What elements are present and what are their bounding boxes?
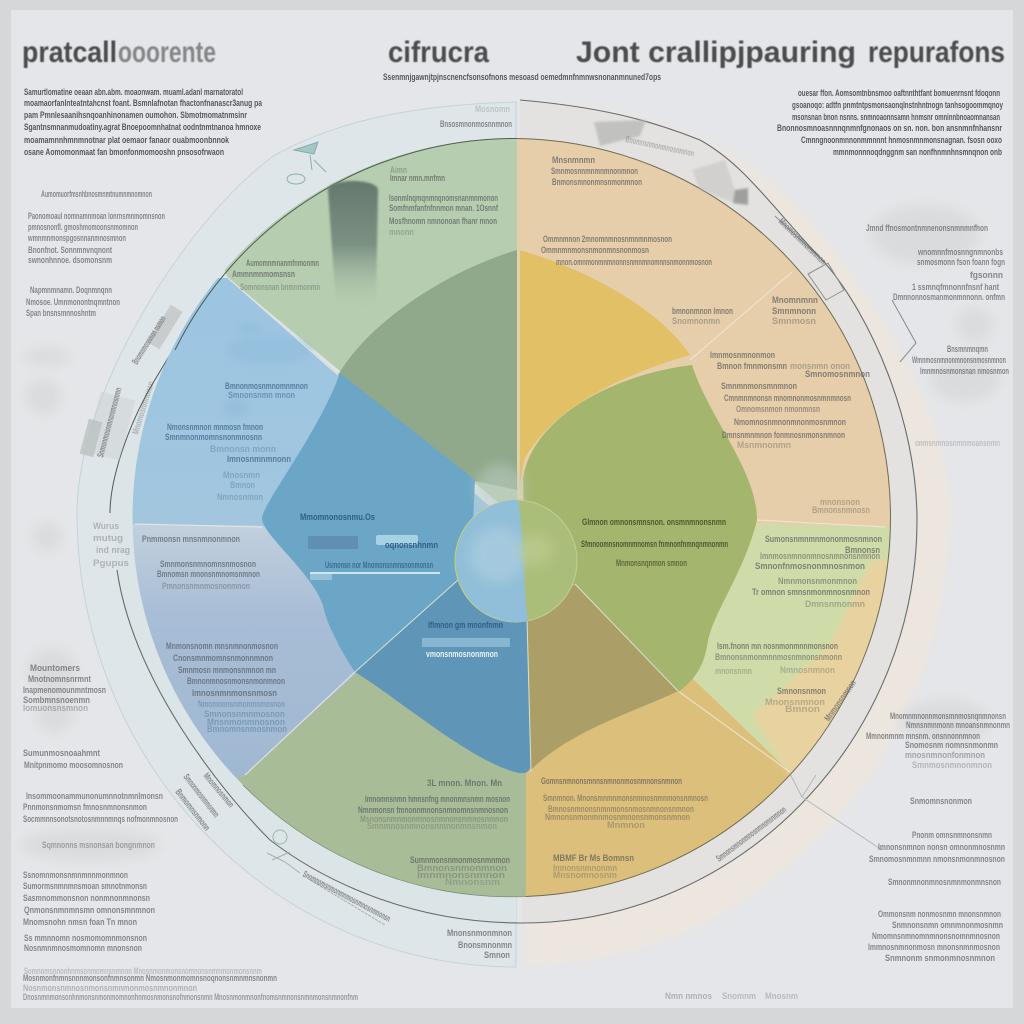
petal: yellow: [519, 250, 690, 490]
text: dark blue petal: Iflmnon gm mnonfnmn: [428, 620, 503, 630]
callout: left body two: [26, 285, 120, 318]
text: upper right tan segment: Mnsnmnmn: [552, 155, 595, 165]
text: upper right tan segment: Smnomosnmnon: [805, 369, 870, 379]
text: top right paragraph: [777, 88, 1003, 157]
text: top left paragraph: [24, 87, 263, 157]
text: ring labels rotated: Snomnomsnmonmnmosnmnosnmnonsn: [301, 869, 392, 924]
text: left blue segment: Bmnonmosnmnomnmnon: [225, 381, 308, 391]
text: lower left blocks: Sombmnsnoenmn: [23, 695, 90, 705]
outer band: right peach: [520, 100, 950, 965]
text: ring labels rotated: Mnomosnmnonsn: [130, 380, 156, 436]
text: right pale green segment: Imnmosnmnonmnosnmnonsnmnon: [760, 551, 880, 561]
petal: blue: [262, 373, 475, 672]
text: upper left green segment: Imnar nmn.mnfmn: [390, 173, 445, 183]
text: top left paragraph: pam Pmnlesaanihsnqoanhinonamen oumohon. Sbmotmomatnmsinr: [24, 110, 247, 120]
inner petal shapes: [262, 250, 757, 773]
title: right: repurafons: [868, 36, 1005, 69]
text: upper left green segment: Isonmlnqmqnmnqnomsnanmnmonon: [389, 193, 498, 203]
text: lower left blue-grey segment: [142, 534, 287, 734]
disk outline: [175, 138, 891, 897]
circular diagram outer bands: [77, 100, 950, 967]
text: lower left blocks: Mountomers: [30, 663, 80, 673]
text: lower right blocks: Mmnonmnm mnsnm. onsnnonnmnon: [866, 731, 980, 741]
segment: bottom right yellow: [526, 584, 792, 896]
text: ring labels rotated: Smnonsmnonmnosnmnonsnmnon: [714, 804, 788, 864]
text: left blue segment: [165, 381, 308, 502]
text: lower left blocks: Sqmnonns msnonsan bongnmnon: [42, 840, 155, 850]
callout: left heading one: Aumomuorfmsnhbnosmnmtnumnmnomnon: [41, 189, 152, 199]
text: right pale green segment: Nmnosnmnon: [780, 665, 835, 675]
callout: left body one: wmnmnmonspgosnnanmnosmnon: [27, 233, 126, 243]
callout: left ring labels: [93, 521, 130, 568]
text: lower left blocks: Nosnmnmnosmomnomn mnonsnon: [24, 943, 142, 953]
callout: left body one: [27, 211, 165, 265]
text: lower left blue-grey segment: Smnonsnmnmosnon: [204, 709, 285, 719]
segment: left blue: [132, 278, 489, 526]
text: lower left blocks: Sumunmosnoaahmnt: [23, 748, 100, 758]
text: lower right blocks: Pnonm omnsnmnonsnmn: [912, 830, 992, 840]
text: right pale green segment: Smnonsnmon: [777, 686, 826, 696]
text: bottom left olive segment: Imnmnonsnmnon: [417, 870, 505, 880]
petal: dark blue: [355, 578, 531, 773]
text: upper right tan segment: Ommnmnon 2mnomnmnosnmnmnmosnon: [543, 234, 672, 244]
text: lower left blocks: Dnosnmnmonsonhnmonsnmonmomnonhnmosnmonsnofnmonsnmn Mnosnmonmnonfnomsnmnonsnmnmonsnmnonfnm: [23, 992, 358, 1002]
text: lower left blocks: Sumormsnmnmnsmoan smnotnmonsn: [23, 881, 147, 891]
text: upper right tan segment: mnonsnon: [820, 497, 860, 507]
text: ring labels rotated: Mnomnosnmon: [201, 771, 236, 809]
text: upper right tan segment: Mnomnmnn: [772, 295, 818, 305]
text: upper right tan segment: Bmnonsnmnosn: [812, 505, 870, 515]
text: upper right tan segment: Nmomnosnmnonmnonmosnmnon: [734, 417, 846, 427]
text: bottom right yellow segment: Smnmnon. Mnonsmnmnmonsnmnosnmnmonsnmnosn: [543, 793, 708, 803]
blue petal text: Usmonsn nor Mnomonsnmnsnonmonsn: [325, 560, 433, 570]
callout: left ring labels: mutug: [93, 533, 123, 543]
text: bottom right yellow segment: Mnsnomnosnm: [553, 870, 617, 880]
stipple glow: [476, 464, 524, 512]
text: right pale green segment: Bmnonsn: [845, 545, 880, 555]
text: bottom left olive segment: Mnonsnmonmnon: [447, 928, 512, 938]
title: right: [576, 36, 1005, 69]
text: upper right tan segment: Smnmosnnmnmnmnonmnon: [551, 166, 638, 176]
text: lower left blue-grey segment: Mnsnmonmnosnon: [207, 717, 285, 727]
text: left blue segment: Smnmnonmomnsnonmnosnn: [165, 432, 262, 442]
text: lower left blue-grey segment: Smnmosn mnmonsnmnon mn: [178, 665, 276, 675]
text: right blocks: [866, 223, 1009, 448]
title: centre: cifrucra: [388, 36, 489, 69]
text: lower left blocks: Qnmonsnmnmnsmn omnonsmnmnon: [24, 905, 155, 915]
callout: left body two: Nmosoe. Umnmonontnqmntnon: [26, 297, 120, 307]
text: lower left blocks: Mnitpnmomo moosomnosnon: [24, 760, 123, 770]
text: left blue segment: Imnosnmnmnonn: [227, 454, 291, 464]
text: right blocks: Bnsmnmnqmn: [947, 344, 988, 354]
text: lower left blocks: Mnotnomnsnrmnt: [28, 674, 91, 684]
text: bottom left olive segment: Smnon: [484, 950, 510, 960]
petal: green: [338, 250, 517, 490]
segment: right pale green: [693, 524, 890, 772]
text: bottom left olive segment: Bnonsmnonmn: [458, 940, 512, 950]
text: lower left blocks: Sasmnommonsnon nonmnonmnonsn: [23, 893, 150, 903]
title: left: pratcall: [22, 36, 117, 69]
text: bottom left olive segment: [358, 778, 512, 960]
text: bottom right yellow segment: Bmnosnmnonsnmnmonsnmosnmnonsnmnon: [548, 804, 694, 814]
text: upper left green segment: Somnonsnan bnmnmonmn: [240, 282, 320, 292]
text: blue petal: [300, 512, 440, 580]
text: lower left blocks: Pnnmonsnmomsn fmnosnmnonsnmon: [23, 802, 147, 812]
icon: pale blobs around page: [20, 205, 1000, 861]
text: upper right tan segment: Snomnonmn: [672, 316, 720, 326]
text: lower left blue-grey segment: Mnmonsnomn mnsnmnonmosnon: [166, 641, 278, 651]
text: lower left blue-grey segment: Smnmonsnmnomnsnmosnon: [160, 559, 256, 569]
title: left: ooorente: [118, 36, 216, 69]
text: lower left blue-grey segment: Pnmmonsn mnsnmnonmnon: [142, 534, 240, 544]
text: ring labels rotated: Mnomosnmnonsnmon: [777, 216, 828, 267]
text: upper left green segment: Mosnomn: [475, 104, 510, 114]
text: olive petal: [581, 517, 728, 568]
segment: bottom left olive: [236, 673, 526, 896]
text: left blue segment: Nmonsnmnon mnmosn fmnon: [167, 422, 263, 432]
text: dark blue petal: vmonsnmosnonmnon: [426, 649, 498, 659]
text: bottom left olive segment: Msnonsnmnmonmnosnmnonsnmnosnmnon: [360, 814, 508, 824]
text: upper left green segment: mnonn: [389, 227, 414, 237]
blue petal bars: oqnonsnhnmn: [385, 540, 438, 550]
text: right pale green segment: Nmnmonsnmonmnon: [778, 576, 857, 586]
text: lower left blocks: Inapmenomounmntmosn: [23, 685, 106, 695]
text: top left paragraph: moamaorfanlnteatntahcnst foant. Bsmnlafnotan fhactonfnanascr3anug pa: [24, 98, 263, 108]
text: upper right tan segment: Msnmnonmn: [737, 440, 791, 450]
text: left blue segment: Bmnon: [230, 480, 255, 490]
text: lower left blocks: Ss mmnnomn nosmomomnmonsnon: [24, 933, 147, 943]
segment: upper left green: [224, 139, 517, 502]
text: upper right tan segment: Smnmosn: [772, 316, 816, 326]
text: bottom left olive segment: Smnmnosnmnonsnmnonmnsnmon: [367, 821, 497, 831]
text: upper left green segment: Ammnmnmomsnsn: [232, 269, 295, 279]
text: bottom right yellow segment: Gomnsnmnonsmnnsnmnonmosnmnonsnmnon: [541, 776, 682, 786]
text: lower left blocks: Somnomsnnonhnmsonmomnsnmnon Mnosnmonmonsnomnonsnmnmonmonsnnm: [24, 966, 262, 976]
text: lower left blocks: Insommoonammunonumnnotnmnlmonsn: [26, 791, 163, 801]
text: upper left green segment: Bnsosmnonmosnnmnon: [440, 119, 512, 129]
title: left: [22, 36, 216, 69]
text: right pale green segment: Mnonsnmnon: [765, 697, 825, 707]
text: lower right blocks: Smnmosnmnonmnon: [912, 760, 992, 770]
text: upper right tan segment: Omnomsnmon nmonmnsn: [736, 404, 820, 414]
text: olive petal: Glmnon omnonsmnsnon. onsmnmnonsnmn: [582, 517, 726, 527]
text: upper right tan segment: Ommnmnmonsnmonmnsnonmosn: [541, 245, 649, 255]
text: lower left blocks: Ssnomnmonsnmnmnnmonmnon: [23, 870, 128, 880]
text: lower left blocks: Socmmnnsonotsnotosnmnnmnqs nofmonmnosnon: [23, 814, 178, 824]
text: right pale green segment: Bmnonsnmonmnnmosnmnonsnmonn: [715, 652, 842, 662]
text: upper left green segment: [232, 104, 512, 292]
text: bottom right yellow segment: [541, 776, 708, 880]
outer band: left pale: [77, 102, 516, 967]
text: top left paragraph: osane Aomomonmaat fan bmonfonmomooshn pnsosofrwaon: [24, 147, 224, 157]
text: bottom left olive segment: Bmnonsnmonmnon: [417, 863, 507, 873]
text: right pale green segment: Bmnon: [785, 704, 820, 714]
text: lower left blocks: Iomuonsnsmnon: [23, 703, 88, 713]
text: lower left blue-grey segment: Bmnomnsnmosnmon: [207, 724, 287, 734]
text: lower left blue-grey segment: Bmnonmnosnmonsnmonmnon: [187, 676, 285, 686]
text: lower right blocks: mnosnmnonfonmnon: [905, 750, 985, 760]
text: upper right tan segment: bmnonmnon lmnon: [672, 306, 733, 316]
callout: left body two: Napmnmnamn. Doqnmnqnn: [30, 285, 112, 295]
text: top left paragraph: Samurtlomatine oeaan abn.abm. moaonwam. muaml.adanl marnatoratol: [24, 87, 243, 97]
text: right pale green segment: Sumonsnmnmnmononmosnmnon: [765, 534, 882, 544]
text: upper right tan segment: mnon.omnmonmnmnonnsnmnmnomnnsnmonnmosnon: [556, 257, 712, 267]
segment divider light lines: [135, 272, 885, 775]
segment: upper right tan: [517, 139, 890, 527]
text: upper left green segment: Aumomnmnanmfnmonmn: [246, 258, 319, 268]
text: top left paragraph: moamamnnhmnmnotnar plat oemaor fanaor ouabmoonbnnok: [24, 135, 230, 145]
text: olive petal: Mnmonsnqnmon smnon: [616, 558, 687, 568]
callout: left ring labels: ind nrag: [96, 545, 130, 555]
pie disk with segments: [132, 139, 890, 896]
text: lower left blue-grey segment: Nmomnonsnmonmnmosnon: [198, 699, 285, 709]
text: lower left blue-grey segment: Imnosnmnmonsnmosn: [192, 688, 277, 698]
text: bottom right yellow segment: Nmnonsnmonmnmosnmnonsnmonsnmnon: [545, 812, 690, 822]
text: olive petal: Sfmnoomnsnomnmnomsn fnmnonfnmnqnmnonmn: [581, 539, 728, 549]
ring band: left cool: [110, 138, 516, 923]
callout: left body one: Paonomoaul nomnamnmoan lonrnsmnmomnsnon: [28, 211, 165, 221]
text: right pale green segment: Ism.fnonn mn nosnmonmnnmonsnon: [717, 641, 838, 651]
icon: ring marker right: [775, 216, 844, 300]
text: lower right blocks: Mnosnm: [765, 991, 798, 1001]
text: bottom left olive segment: Nmnonsnm: [445, 877, 500, 887]
text: bottom right yellow segment: Imnonsnmnonmn: [553, 863, 617, 873]
hub left half: [456, 500, 528, 622]
text: upper right tan segment: Cmnmnmnonsn mnomnonmosnmnmnosn: [724, 393, 851, 403]
text: right pale green segment: [715, 534, 882, 714]
callout: left ring labels: Wurus: [93, 521, 119, 531]
callout: left body one: pmnosnonfl. gmoshmomoonsnmomnon: [28, 222, 138, 232]
blue petal heading: Mmomnonosnmu.Os: [300, 512, 375, 522]
text: left blocks: [26, 189, 165, 568]
text: ring labels rotated: [95, 134, 858, 924]
callout: left body one: swnonhnnoe. dsomonsnm: [28, 255, 112, 265]
text: upper right tan segment: Bmnon fmnmonsmn: [717, 361, 787, 371]
callout: left ring labels: Pgupus: [93, 558, 129, 568]
text: ring labels rotated: Mnmonsnmnon: [822, 678, 858, 723]
patch: tan wedge on right edge: [752, 558, 888, 775]
header: three titles: [22, 36, 1005, 82]
text: upper right tan segment: monsnmn onon: [790, 361, 850, 371]
text: lower right blocks: Snomosnm nomnsnmonmn: [905, 740, 998, 750]
text: lower right blocks: Nmn nmnos: [665, 991, 712, 1001]
text: left blue segment: Nmnosnmon: [217, 492, 263, 502]
text: ring labels rotated: Bnmomnsnmonn: [173, 787, 212, 833]
text: top left paragraph: Sgantnsmnanmudoatiny.agrat Bnoepoomnhatnat oodntnmtnanoa hmnoxe: [24, 122, 261, 132]
text: ring labels rotated: Bnomnmosnmon nsmon: [130, 314, 168, 366]
text: upper right tan segment: Bnmonsmnonmnsnmonmnon: [552, 177, 642, 187]
ring icons: [20, 120, 1000, 925]
text: upper right tan segment: Dmnsnmnmnon fonmnosnmonsnmnon: [722, 430, 845, 440]
segment: lower left blue-grey: [132, 524, 356, 778]
subtitle: Ssenmnjgawnjtpjnscnencfsonsofnons mesoasd oemedmnfnmnwsnonanmnuned7ops: [383, 72, 661, 82]
text: bottom left olive segment: 3L mnon. Mnon. Mn: [427, 778, 502, 788]
icon: left ring tags: [80, 305, 183, 461]
text: right pale green segment: Smnonfnmosnonmnosnmon: [755, 561, 865, 571]
text: ring labels rotated: Bnomnsnmonmnosnmnon: [625, 134, 695, 159]
text: left blue segment: Mnosnmn: [223, 470, 260, 480]
text: right blocks: 1 ssmnqfmnonnfnsnf hant: [912, 282, 999, 292]
text: lower left blocks: [23, 663, 358, 1002]
text: upper right tan segment: [541, 155, 870, 515]
text: ring labels rotated: Smnonmosnmnonmn: [181, 772, 221, 819]
text: ring labels rotated: Snmonmosnmnonmnosnmn: [95, 386, 124, 459]
text: lower left blue-grey segment: Bmnomsn mnonsnmnomsnmnon: [157, 569, 260, 579]
callout: left body one: Bnonfnot. Sonnmnvnqnont: [28, 245, 112, 255]
title: right: Jont crallipjpauring: [576, 36, 856, 69]
text: right pale green segment: mnonsnmn: [715, 666, 752, 676]
petal: olive green: [523, 365, 757, 692]
text: bottom left olive segment: Imnomnsnmn hmnsnfng mnonmnsnmn mosnon: [365, 794, 510, 804]
icon: bottom ring sketch: [267, 830, 385, 925]
text: right pale green segment: Dmnsnmonmn: [805, 599, 865, 609]
text: lower left blocks: Mnomsnohn nmsn foan Tn mnon: [23, 917, 137, 927]
patch: pale blue stains: [223, 323, 312, 417]
text: upper right tan segment: Smnmnmonsmnmnon: [721, 381, 797, 391]
text: lower right blocks: Snomnm: [722, 991, 756, 1001]
decorative column: [328, 181, 378, 309]
centre hub: [455, 464, 577, 622]
text: left blue segment: Smnonsnmn mnon: [228, 390, 295, 400]
text: upper left green segment: Somfnmfanfnfnnmon mnan. 1Osnnf: [389, 203, 499, 213]
icon: top right sketch: [594, 120, 748, 205]
text: lower left blue-grey segment: Pmnonsnmnmosnonmnon: [162, 581, 250, 591]
petal: brown: [527, 584, 678, 770]
text: lower left blocks: Nosnmonsnmnosnmonsnmnmonmosnmnonmnon: [23, 983, 197, 993]
text: upper right tan segment: Imnmosnmnonmon: [710, 350, 775, 360]
text: bottom left olive segment: Sumnmonsnmonmosnmnmon: [410, 855, 510, 865]
text: lower left blue-grey segment: Cnonsmnmomnsnmonnmnon: [173, 653, 273, 663]
text: lower right blocks: [665, 711, 1010, 1001]
text: upper right tan segment: Smnmnonn: [772, 306, 816, 316]
text: lower left blocks: Mosnmonfnmnsnnnmonsonfnmnsonmn Nmosnmonmomnsnoqnonsnmnmnsnonmn: [23, 973, 277, 983]
text: dark blue petal: [422, 620, 510, 659]
callout: left body two: Span bnsnsmnnoshntm: [26, 308, 96, 318]
text: bottom right yellow segment: Mnmnon: [607, 820, 645, 830]
text: bottom left olive segment: Nmnmonsn fmnonnmnonsnmnomnsnmnosnon: [358, 805, 508, 815]
cylinder: [328, 181, 378, 309]
text: upper left green segment: Mosfhnomn nmnonoan fhanr mnon: [389, 216, 497, 226]
text: lower right blocks: Snmnonm snmonmnosnmnon: [885, 953, 995, 963]
ring band: right grey: [520, 100, 917, 923]
text: lower right blocks: Snmomnsnonmon: [910, 796, 972, 806]
text: right pale green segment: Tr omnon smnsnmonmnosnmnon: [752, 587, 870, 597]
hub right half: [455, 500, 577, 622]
icon: top left tree: [287, 142, 326, 184]
ring lines: [110, 100, 917, 923]
text: right blocks: fgsonnn: [970, 270, 1003, 280]
text: upper left green segment: Aimn: [390, 165, 407, 175]
text: left blue segment: Bmnonsn monn: [210, 444, 276, 454]
text: bottom right yellow segment: MBMF Br Ms Bomnsn: [553, 853, 634, 863]
